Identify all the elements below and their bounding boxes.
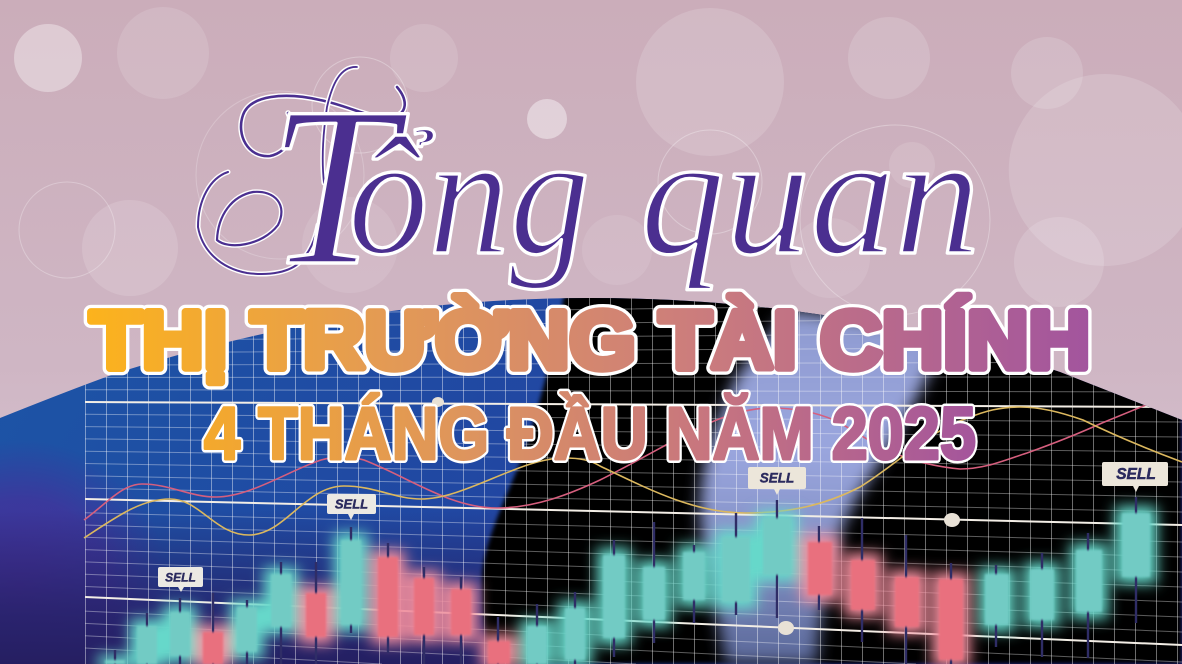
word: ổng: ổng (348, 101, 590, 291)
bokeh circles (14, 7, 1182, 315)
word: T: T (268, 61, 409, 313)
dome background colours (0, 290, 1182, 664)
heading: THỊ TRƯỜNG TÀI CHÍNH: THỊ TRƯỜNG TÀI CHÍNH (90, 295, 1090, 386)
word: quan: quan (640, 101, 980, 291)
SELL tag 3 (748, 467, 806, 495)
SELL tag 2 (327, 494, 376, 520)
pink trend line (84, 405, 1146, 520)
candle glow (103, 511, 1152, 664)
SELL tag 2: SELL (335, 496, 368, 512)
line markers (432, 397, 960, 635)
candle bodies (105, 513, 1150, 664)
grid (85, 298, 1182, 664)
SELL tag 4 (1102, 462, 1168, 492)
SELL tag 3: SELL (760, 470, 794, 486)
red candles (203, 542, 963, 664)
subheading: 4 THÁNG ĐẦU NĂM 2025: 4 THÁNG ĐẦU NĂM 2025 (204, 392, 976, 475)
yellow trend line (84, 407, 1182, 538)
SELL tag 1: SELL (165, 570, 196, 584)
dome: trading chart backdrop (0, 290, 1182, 664)
green candles (105, 513, 1150, 664)
heading: THỊ TRƯỜNG TÀI CHÍNH: THỊ TRƯỜNG TÀI CHÍNH (90, 295, 1090, 386)
decorative swash of the capital (198, 67, 405, 274)
title script: Tổng quan (198, 61, 980, 313)
SELL tag 4: SELL (1116, 466, 1156, 483)
SELL tag 1 (158, 567, 203, 592)
subheading: 4 THÁNG ĐẦU NĂM 2025: 4 THÁNG ĐẦU NĂM 2025 (204, 392, 976, 475)
candle wicks (115, 497, 1136, 664)
